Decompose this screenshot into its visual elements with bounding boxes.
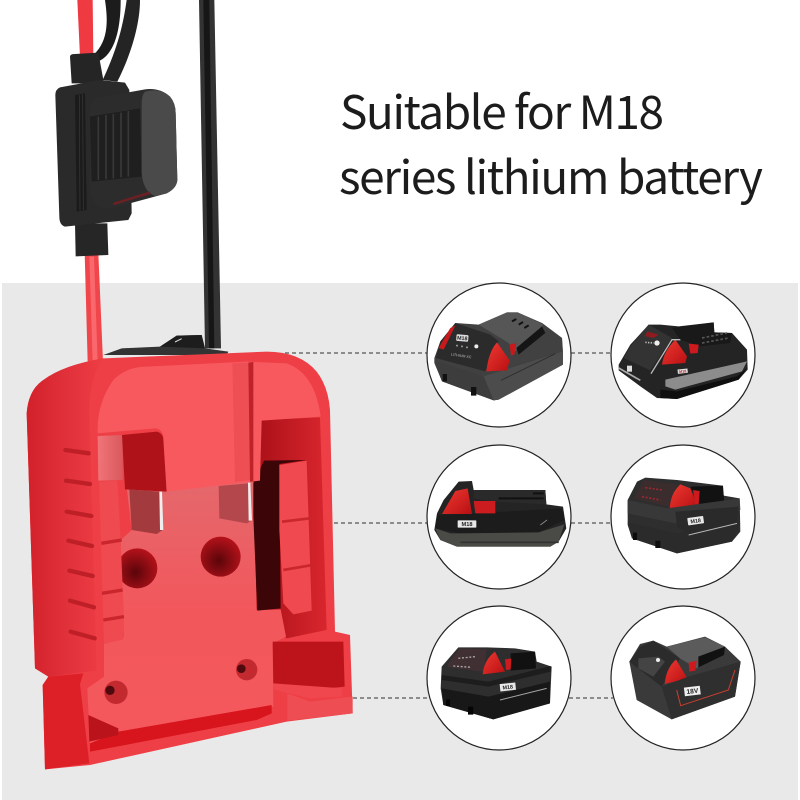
rib 1 xyxy=(65,450,89,453)
connector row 2 xyxy=(334,522,611,524)
rib 7 xyxy=(71,632,95,638)
battery 4 label xyxy=(687,516,704,525)
battery 6 image xyxy=(629,637,741,719)
rib 3 xyxy=(67,512,91,516)
battery 6 image: 18V xyxy=(686,688,699,696)
battery 3 image: M18 xyxy=(461,522,473,528)
red wire lower xyxy=(85,253,103,362)
cable assembly with fuse holder xyxy=(55,0,221,362)
battery 4 image: M18 xyxy=(690,518,701,525)
bottom right tab xyxy=(273,642,353,721)
red wire upper xyxy=(77,0,93,57)
right rail xyxy=(279,461,312,614)
fuse holder top sleeve xyxy=(70,53,104,83)
grey lower panel xyxy=(2,283,798,800)
battery 5 label xyxy=(500,683,516,691)
inner right recess xyxy=(253,417,327,638)
circle: battery 3 xyxy=(427,445,571,589)
rib 6 xyxy=(70,601,94,607)
mounting hole right xyxy=(201,537,241,577)
metal contact right xyxy=(219,483,252,523)
right slot xyxy=(253,460,307,611)
heading xyxy=(339,77,763,208)
battery 2 image: M18 xyxy=(679,369,686,374)
fuse holder strap xyxy=(91,0,121,63)
fuse holder lower sleeve xyxy=(75,223,108,256)
rib 4 xyxy=(68,541,92,546)
battery 3 image xyxy=(434,481,566,547)
battery 5 image xyxy=(441,647,552,719)
lower plate xyxy=(87,482,286,743)
adapter silhouette xyxy=(27,352,353,769)
fuse holder body xyxy=(55,80,132,227)
rocker switch xyxy=(103,335,228,355)
black wire xyxy=(199,0,221,348)
fuse holder cap xyxy=(90,89,177,209)
bottom left small tab xyxy=(88,715,118,742)
battery 1 image: LITHIUM XC xyxy=(451,353,472,359)
heading line 1: Suitable for M18 xyxy=(340,77,664,143)
battery 1 image: M18 xyxy=(457,336,468,342)
connector row 1 xyxy=(285,352,611,354)
battery 2 image xyxy=(619,322,748,399)
battery 3 label xyxy=(458,520,476,528)
battery 1 image xyxy=(434,312,563,400)
top cover xyxy=(98,362,321,492)
grip ribs xyxy=(65,450,95,638)
window recess xyxy=(122,432,167,492)
left rail xyxy=(99,481,124,644)
circle: battery 5 xyxy=(427,606,571,750)
red battery adapter xyxy=(27,352,353,769)
battery options grid xyxy=(427,283,755,750)
rib 2 xyxy=(66,481,90,484)
bottom left block xyxy=(43,673,89,769)
centre strip on cover xyxy=(232,363,250,482)
metal contact left xyxy=(129,489,163,534)
screw left xyxy=(104,681,128,704)
mounting hole left xyxy=(117,548,157,588)
battery 6 label xyxy=(684,686,701,696)
rib 5 xyxy=(69,571,93,576)
battery 2 label xyxy=(677,368,688,374)
circle: battery 6 xyxy=(611,606,755,750)
connector row 3 xyxy=(353,697,613,699)
heading line 2: series lithium battery xyxy=(339,142,763,208)
side face xyxy=(27,358,103,677)
battery 5 image: M18 xyxy=(502,684,513,692)
bottom lip xyxy=(90,705,272,752)
screw right xyxy=(236,659,257,680)
circle: battery 1 xyxy=(427,283,571,427)
left upper window xyxy=(98,435,123,481)
battery 1 label xyxy=(456,334,469,342)
battery 4 image xyxy=(628,478,740,553)
circle: battery 4 xyxy=(611,445,755,589)
dashed connector lines xyxy=(285,353,613,698)
circle: battery 2 xyxy=(611,283,755,427)
